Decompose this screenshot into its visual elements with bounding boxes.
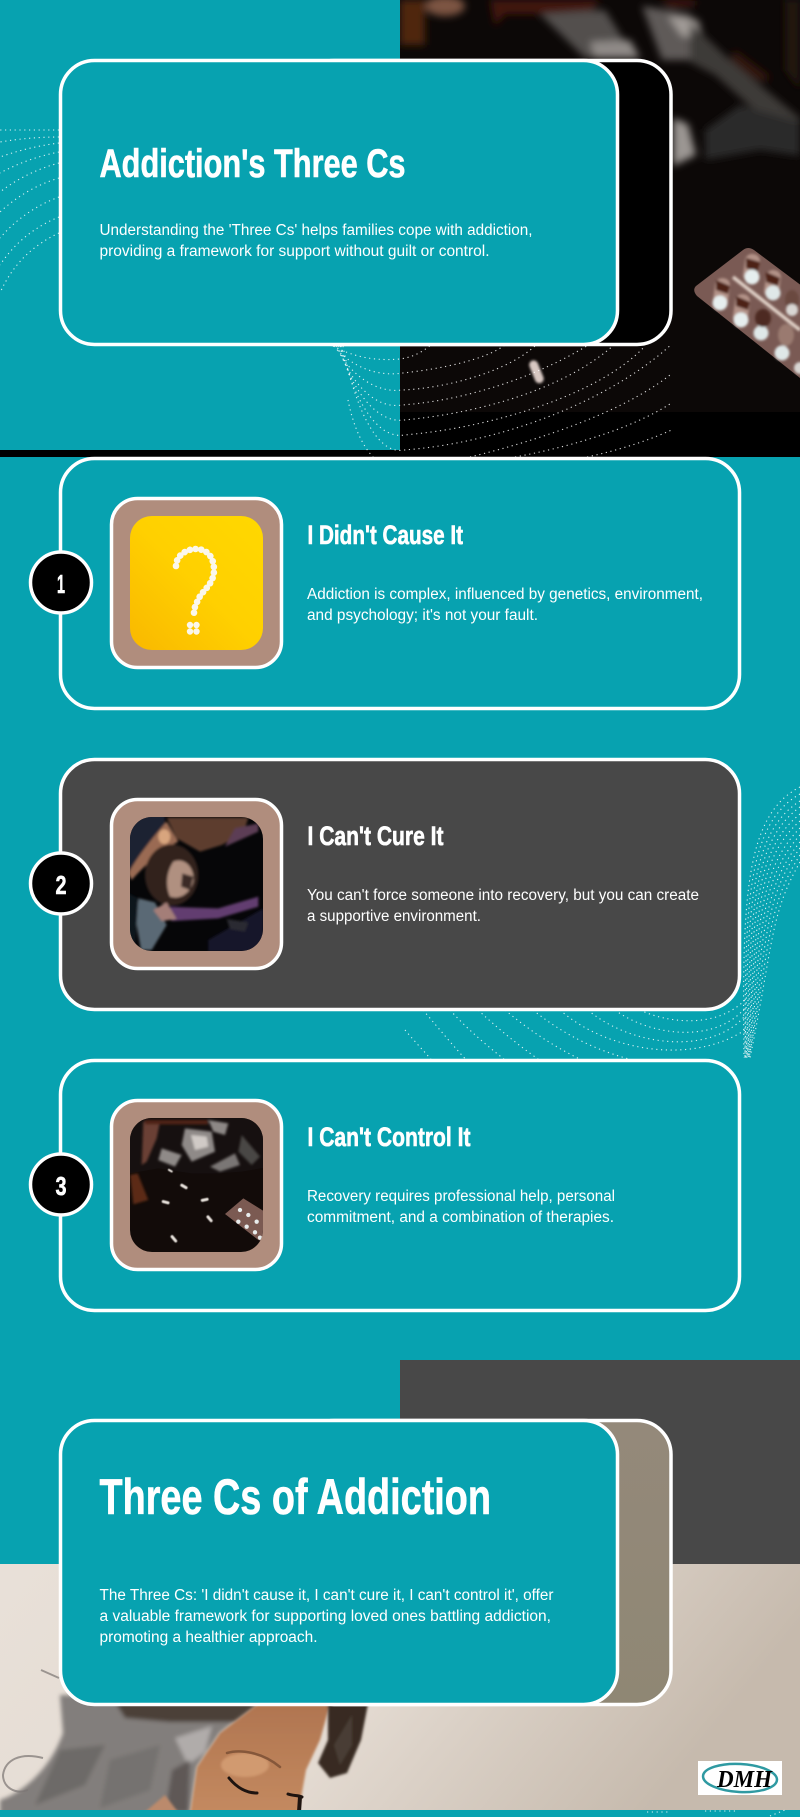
- panel: hero intro card: [60, 60, 618, 344]
- bottom teal strip with dots: [0, 1810, 800, 1817]
- number badge 1: 1: [57, 569, 65, 599]
- closing text: [100, 1587, 554, 1646]
- image frame 2: [112, 800, 282, 968]
- photo: man comforting woman: [130, 817, 263, 951]
- body text 3: Recovery requires professional help, personal: [307, 1188, 615, 1205]
- closing text: The Three Cs: 'I didn't cause it, I can't cure it, I can't control it', offer: [100, 1587, 554, 1604]
- number badge 1: [30, 552, 92, 613]
- blister pack: [694, 248, 800, 385]
- intro text: Understanding the 'Three Cs' helps families cope with addiction,: [100, 222, 532, 239]
- face: [145, 1704, 330, 1815]
- body text 1: [307, 586, 703, 624]
- panel: closing card: [60, 1420, 618, 1704]
- body text 2: [307, 887, 699, 925]
- body text 1: Addiction is complex, influenced by genetics, environment,: [307, 586, 703, 603]
- number badge 3: [30, 1154, 92, 1215]
- body text 2: You can't force someone into recovery, but you can create: [307, 887, 699, 904]
- bottom photo: woman with grey hair: [0, 1564, 800, 1815]
- panel: item 2: [30, 760, 740, 1010]
- number badge 2: 2: [56, 870, 66, 900]
- number badge 3: 3: [56, 1171, 66, 1201]
- dotted waves: right of item 2: [405, 787, 800, 1064]
- body text 2: a supportive environment.: [307, 908, 481, 925]
- panel: item 1: [30, 458, 740, 708]
- loose pill: [528, 359, 545, 385]
- heading: I Didn't Cause It: I Didn't Cause It: [308, 520, 463, 550]
- dotted waves: hero left: [0, 130, 59, 293]
- body text 3: [307, 1188, 615, 1226]
- closing text: promoting a healthier approach.: [100, 1629, 318, 1646]
- intro text: providing a framework for support without guilt or control.: [100, 243, 490, 260]
- dark curl of hair: [318, 1704, 368, 1778]
- body text 3: commitment, and a combination of therapies.: [307, 1209, 614, 1226]
- grey block behind closing card: [400, 1360, 800, 1564]
- panel: item 3: [30, 1060, 740, 1310]
- image frame 1: [112, 498, 282, 668]
- hero back card: [300, 60, 671, 344]
- back card for closing panel: [300, 1420, 671, 1704]
- hair: [0, 1695, 262, 1815]
- photo: shirt and pills: [130, 1118, 263, 1252]
- dotted waves: hero bottom: [333, 340, 676, 460]
- hero photo: shirt and scattered pills: [400, 0, 800, 457]
- black strip under teal hero: [0, 450, 800, 457]
- closing text: a valuable framework for supporting loved ones battling addiction,: [100, 1608, 551, 1625]
- intro text: [100, 222, 532, 260]
- heading: I Can't Cure It: I Can't Cure It: [308, 821, 444, 851]
- eye and brow: [227, 1751, 302, 1812]
- number badge 2: [30, 853, 92, 914]
- body text 1: and psychology; it's not your fault.: [307, 607, 538, 624]
- photo: pills forming question mark: [130, 516, 263, 650]
- logo: DMH: [698, 1761, 782, 1795]
- logo: DMH: DMH: [716, 1767, 773, 1793]
- image frame 3: [112, 1100, 282, 1270]
- title: Addiction's Three Cs: Addiction's Three Cs: [100, 142, 406, 186]
- title: Three Cs of Addiction: Three Cs of Addiction: [100, 1469, 491, 1525]
- heading: I Can't Control It: I Can't Control It: [308, 1122, 471, 1152]
